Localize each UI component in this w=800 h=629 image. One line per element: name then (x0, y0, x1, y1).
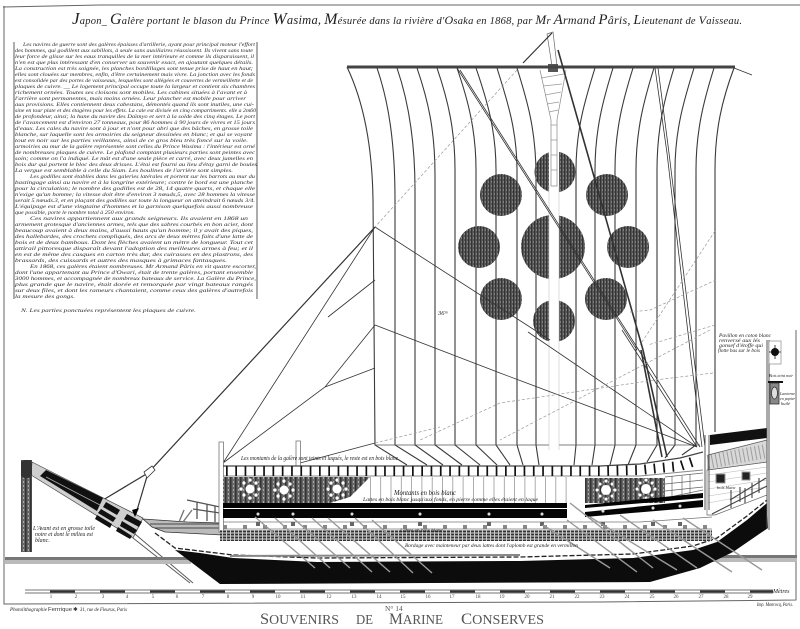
publisher credit: Ferrrique (48, 607, 72, 613)
text block: description of the galley: attirail pittoresque disparaît devant l'adoption des meilleures armes à feu; et il (15, 245, 254, 252)
scale numbers: 22 (574, 595, 580, 600)
galley labels: Lattes en bois blanc (399, 528, 444, 534)
bow note: noire et dont le milieu est (35, 532, 93, 538)
stern notes (718, 333, 795, 406)
text block: description of the galley: elles sont clouées sur membres, enfin, d'être certainement mais vivre. La jonction avec les fonds (15, 71, 256, 78)
galley labels: Lattes en bois blanc jusqu'aux fonds, en pierre comme elles étaient en laque (362, 496, 539, 503)
text block: description of the galley: sur deux files, et dont les rameurs chantaient, comme ceux des galères d'autrefois (15, 287, 254, 294)
text block: description of the galley: bois dur qui portent le bloc des deux drisses. L'étai est fourni au lieu d'étay garni de boules (15, 161, 258, 168)
scale numbers: 16 (426, 595, 431, 600)
scale numbers: 9 (252, 595, 255, 600)
plate number: N° 14 (385, 604, 403, 613)
publisher credit (9, 606, 127, 613)
scale numbers: 26 (674, 595, 679, 600)
bow: upper part of post (21, 460, 32, 478)
text block: description of the galley: L'équipage est d'une vingtaine d'hommes et la garnison quelquefois aussi nombreuse (14, 203, 254, 210)
stern post (767, 340, 769, 530)
scale numbers: 5 (152, 595, 155, 600)
scale numbers: 4 (126, 595, 129, 600)
scale numbers: 15 (400, 595, 406, 600)
yard (347, 66, 735, 68)
rail (223, 452, 703, 466)
stern notes: flotte bas sur le bois (718, 349, 760, 354)
stern lantern (768, 381, 783, 404)
text block: description of the galley: des hommes, qui godillent aux sabillots, à seule sans auxiliaires réussissent. Ils vivent sans toute (15, 48, 254, 54)
text block: description of the galley: richement ornées. Toutes ses cloisons sont mobiles. Les cabines situées à l'avant et à (15, 90, 247, 96)
galley side (220, 452, 762, 573)
text block: description of the galley: 3000 hommes, et accompagnée de nombreux bateaux de service. La Galère du Prince, (14, 276, 257, 282)
scale numbers: 1 (50, 595, 53, 600)
text block: description of the galley: beaucoup avaient à deux mains, d'aussi hauts qu'un homme; il y avait des piques, (15, 228, 254, 234)
text block: description of the galley: En 1868, ces galères étaient nombreuses. Mr Armand Pâris en vit quatre escorter, (29, 264, 257, 270)
stern flag (769, 341, 781, 364)
poop: roof (710, 428, 767, 445)
halyard (523, 33, 552, 63)
publisher credit: ✱ (73, 606, 78, 613)
sail foot (375, 444, 700, 446)
text block: description of the galley: que possible, porte le nombre total à 250 environ. (15, 210, 135, 216)
bow note (32, 526, 95, 544)
poop cabin (705, 340, 783, 530)
deck band rows (223, 517, 712, 529)
text block: description of the galley: sine en tour plate et des étagères pour les effets. La cale est divisée en cinq compartiments. elle a 2m60 (15, 107, 256, 114)
scale numbers: 19 (500, 595, 505, 600)
bow: first striped block (95, 502, 120, 528)
text block: description of the galley: serait 5 nœuds.3, et en plaçant des godilles sur toute la longueur on atteindrait 6 nœuds 3/4. (15, 198, 255, 204)
bow: arrow rope tips (132, 508, 139, 517)
text block: description of the galley: des hallebardes, des crochets compliqués, des arcs de deux mètres faits d'une latte de (15, 233, 254, 240)
blazon discs of Prince Wasima (458, 152, 649, 342)
text block: description of the galley: n'exige qu'un homme; la vitesse doit être d'environ 3 nœuds,5, avec 28 hommes la vitesse (15, 192, 256, 198)
text block: description of the galley: est consolidée par des portes de vaisseaux, lesquelles sont allégées et couvertes de vermeillette et de (15, 78, 253, 84)
text block: description of the galley: tout en noir sur les parties veillantes, ainsi de ce gros bleu très foncé sur la voile. (15, 137, 248, 144)
heavy shroud (558, 50, 667, 457)
rail: lower stringer (223, 470, 703, 476)
text block: description of the galley: soin; comme on l'a indiqué. Le mât est d'une seule pièce et carré, avec deux jumelles en (15, 156, 253, 162)
scale numbers: 28 (724, 595, 729, 600)
water line (5, 555, 797, 564)
rigging ropes (223, 68, 752, 463)
scale numbers: 23 (600, 595, 605, 600)
scale numbers: 18 (476, 595, 481, 600)
scale numbers (50, 595, 753, 600)
forestay: fork block (144, 466, 155, 478)
forestay to bow (103, 227, 375, 517)
text block: description of the galley (14, 41, 258, 300)
galley labels: Les montants de la galère sont teints et laqués, le reste est en bois blanc (240, 456, 398, 462)
galley labels: Bordage avec mainteneur par deux lattes dont l'aplomb est grande en vermillon (405, 543, 578, 549)
hull: lower white planking (143, 490, 768, 557)
poop: balustrade (708, 440, 767, 470)
bow: second striped block (116, 514, 142, 539)
sail pole at stern (705, 435, 709, 510)
text block: description of the galley: d'eaux. Les cales du navire sont à jour et n'ont pour abri que des bâches, en grosse toile (15, 126, 254, 132)
poop: label: bois blanc (717, 485, 736, 490)
bow: light stripe in sheathing (46, 477, 100, 505)
galley labels (240, 456, 578, 549)
text block: description of the galley: leur force de glisse sur les eaux tranquilles de la mer intérieure et comme ils disparaissent, il (15, 53, 254, 60)
scale numbers: 12 (326, 595, 332, 600)
text block: description of the galley: La construction est très soignée, les planches bordillages sont tenue prise de haut en haut; (14, 66, 253, 72)
scale numbers: 27 (698, 595, 704, 600)
text block: description of the galley: Ces navires appartiennent aux grands seigneurs. Ils avaient en 1868 un (30, 216, 248, 222)
text block: description of the galley: bastingage ainsi au navire et à la longrine extérieure; contre le bord est une planche (15, 180, 254, 186)
oar ports row (223, 525, 712, 529)
stern notes: Lanterne (779, 391, 795, 396)
text block: description of the galley: Les navires de guerre sont des galères épaisses d'artillerie, ayant pour principal moteur l'effort (22, 41, 255, 48)
scale numbers: 29 (748, 595, 753, 600)
printer credit: Imp. Monrocq, Paris. (756, 603, 793, 608)
scale numbers: 14 (376, 595, 382, 600)
scale numbers: 25 (650, 595, 655, 600)
black wales aft (585, 493, 703, 517)
scale numbers: 7 (202, 595, 205, 600)
poop: wall (707, 462, 767, 515)
series title: CONSERVES (461, 611, 544, 628)
sail (103, 32, 752, 517)
scale numbers: 2 (75, 595, 78, 600)
hull: wale strip (230, 555, 520, 556)
publisher credit: Photolithographie (9, 607, 48, 613)
stern notes: renversé aux lés (719, 339, 760, 344)
text block: description of the galley: plaques de cuivre. __ Le logement principal occupe toute la largeur et contient six chambres (14, 84, 256, 90)
series title: MARINE (389, 611, 443, 628)
hull: dashed sheer line (155, 500, 767, 558)
scale bar (25, 589, 790, 600)
text block: description of the galley: dont l'une appartenant au Prince d'Owari, était de trente galères, portant ensemble (15, 270, 254, 276)
series title: DE (356, 612, 373, 627)
white upper panel posts (370, 477, 567, 503)
scale numbers: 11 (301, 595, 306, 600)
black wales forward (223, 503, 567, 518)
sail battens (347, 67, 734, 465)
poop: wall planking (708, 467, 767, 503)
dashed bolines (375, 70, 716, 443)
text block: description of the galley: armement grotesque d'anciennes armes, tels que des sabres courbés en bon acier, dont (15, 222, 253, 228)
scale numbers: 20 (524, 595, 530, 600)
scale numbers: 24 (624, 595, 630, 600)
poop: side gallery (712, 478, 767, 514)
text block: description of the galley: blanche, sur laquelle sont les armoiries du seigneur dessinées en blanc; et qui se voyant (15, 132, 252, 138)
scale unit: Mètres (772, 589, 790, 595)
scale numbers: 3 (102, 595, 105, 600)
stern notes: en papier (780, 396, 795, 401)
series title (260, 611, 544, 628)
side planks aft (665, 473, 703, 498)
hatched lower band (220, 530, 712, 541)
text block: description of the galley: pour la circulation; le nombre des godilles est de 28, 14 quatre quarts, et chaque elle (14, 186, 256, 192)
text block: description of the galley: l'arrière sont permanentes, mais moins ornées. Leur plancher est mobile pour arriver (15, 96, 247, 102)
scale numbers: 8 (227, 595, 230, 600)
text block: description of the galley: aux provisions. Elles contiennent deux cabestans, démontés quand ils sont inutiles, une cui- (15, 102, 254, 108)
text block: description of the galley: de nombreuses plaques de cuivre. Le plafond comptant plusieurs parties sont peintes avec (15, 149, 256, 156)
title: Japon_ Galère portant le blason du Prince Wasima, Mésurée dans la rivière d'Osaka en 1868, par Mr Armand Pâris, Lieutenant de Vaisseau. (72, 9, 742, 28)
bow ram (21, 460, 220, 584)
note: copper plates: N. Les parties ponctuées représentent les plaques de cuivre. (20, 308, 196, 314)
text block: description of the galley: brassards, des cuissards et autres des masques à grimaces fantasques. (15, 257, 227, 264)
bow note: L'Avant est en grosse toile (32, 526, 95, 532)
rowlocks (258, 506, 680, 514)
bow note: blanc. (35, 538, 50, 544)
hull: black underbody (175, 503, 768, 584)
rail posts (226, 461, 695, 471)
text block: description of the galley: armoiries au mur de la galère représentée sont celles du Prince Wasima : l'intérieur est orné (15, 144, 256, 150)
scale numbers: 17 (450, 595, 455, 600)
text block: description of the galley: bois et de deux bambous. Dont les flèches avaient un mètre de longueur. Tout cet (15, 239, 254, 246)
bow: black sheathing (40, 470, 103, 511)
bow ornament post (21, 460, 32, 552)
scale numbers: 6 (176, 595, 179, 600)
stern notes: gonsef d'étoffe qui (719, 344, 764, 349)
series title: SOUVENIRS (260, 611, 339, 628)
oars (255, 503, 762, 573)
galley labels: Montants en bois blanc (393, 489, 457, 497)
scale numbers: 21 (550, 595, 555, 600)
sail measure label: 36ᵐ (437, 310, 448, 317)
ornament panel: left (223, 477, 370, 503)
rowlock stands (258, 522, 680, 526)
scale numbers: 13 (352, 595, 357, 600)
text block: description of the galley: de l'avancement est d'environ 27 tonneaux, pour 86 hommes à 90 jours de vivres et 15 jours (15, 120, 256, 126)
stern notes: Pavillon en coton blanc (718, 333, 772, 339)
text block: description of the galley: n'en est que plus intéressant d'en conserver un souvenir exact, en ajoutant quelques détails. (15, 60, 253, 66)
text block: description of the galley: de profondeur, ainsi; la hune du navire des Daïmyo et sert à la solde des cinq étages. Le port (15, 113, 255, 120)
text block: description of the galley: la mesure des gongs. (15, 294, 75, 300)
text block: description of the galley: plus grande que le navire, était dorée et remorquée par vingt bateaux rangés (14, 282, 254, 288)
stern notes: huilé (781, 401, 791, 406)
text block: description of the galley: La vergue est semblable à celle du Siam. Les boulines de l'arrière sont simples. (14, 168, 233, 174)
text block: description of the galley: Les godilles sont établies dans les galeries latérales et portent sur les barrots au mur du (29, 174, 255, 180)
forecastle deck (143, 500, 222, 535)
bow post and midship post (219, 441, 300, 532)
stern notes: Bois teint noir (769, 373, 793, 378)
publisher credit: 31, rue de Fleurus, Paris (79, 607, 127, 613)
text block: description of the galley: en est de même des casques en carton très dur, des cuirasses en des plastrons, des (15, 252, 254, 258)
scale numbers: 10 (276, 595, 281, 600)
mast (540, 32, 566, 450)
poop: windows (716, 472, 750, 483)
ornament panel: right (585, 478, 665, 503)
